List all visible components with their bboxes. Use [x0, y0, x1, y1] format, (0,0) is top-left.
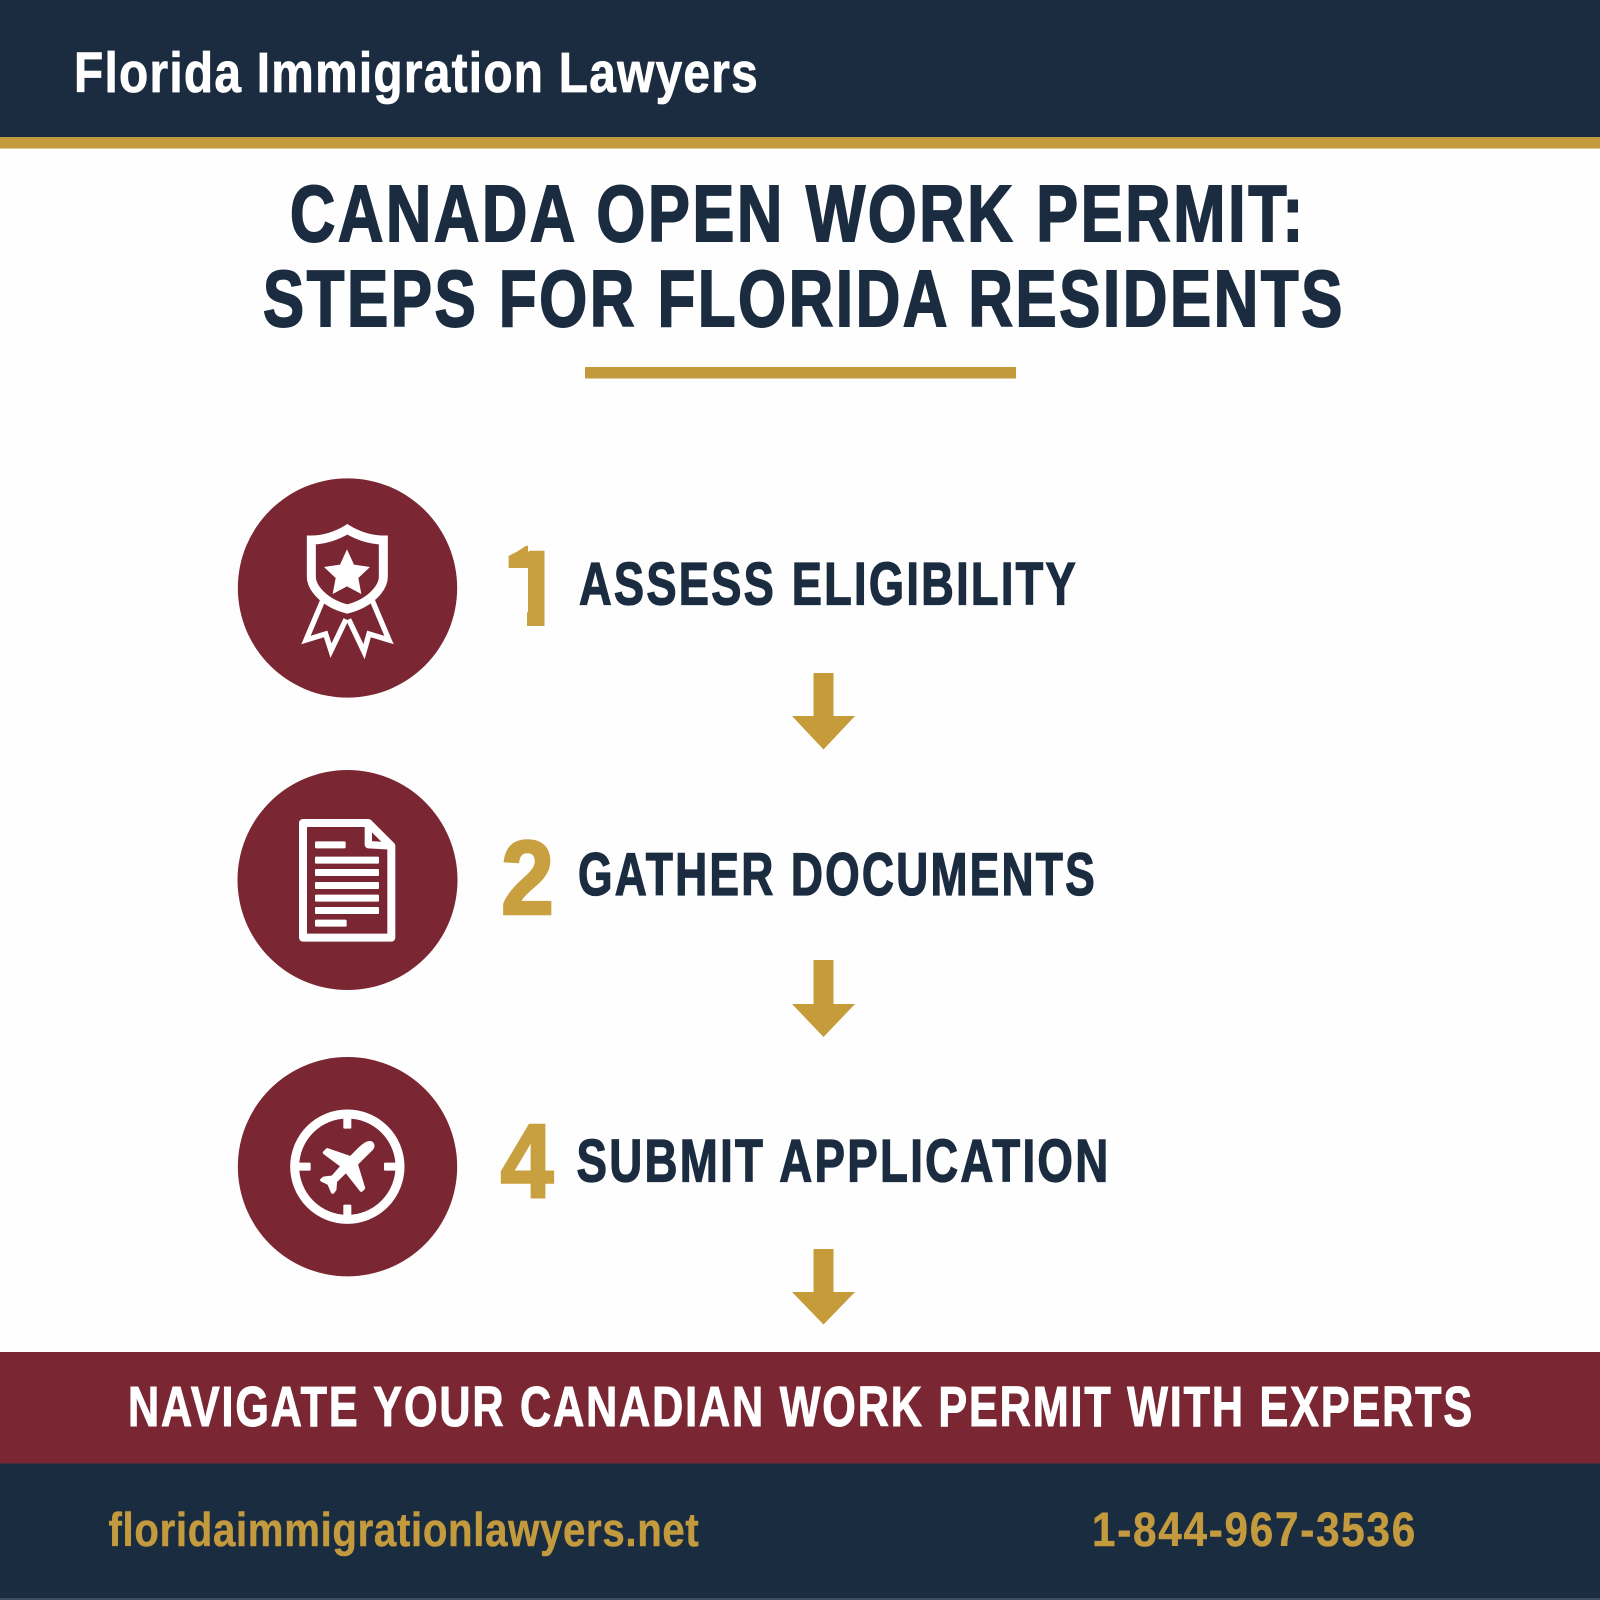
number 4: 4	[500, 1103, 554, 1220]
number 1: 1	[505, 530, 563, 648]
step 2: gather documents	[237, 770, 1097, 990]
icon: document	[237, 770, 457, 990]
step label: ASSESS ELIGIBILITY	[579, 550, 1078, 618]
phone number: 1-844-967-3536	[1092, 1504, 1417, 1557]
arrow 3	[792, 1249, 855, 1324]
step label: SUBMIT APPLICATION	[576, 1128, 1110, 1194]
icon: plane in compass	[238, 1057, 457, 1276]
title underline	[585, 367, 1016, 378]
step 3: submit application	[238, 1057, 1111, 1276]
step 1: assess eligibility	[238, 478, 1078, 698]
title	[263, 169, 1345, 343]
number 2: 2	[501, 820, 554, 937]
call to action banner	[0, 1352, 1600, 1464]
footer band	[0, 1464, 1600, 1600]
number 1	[508, 546, 544, 626]
arrow 2	[792, 960, 855, 1037]
brand name: Florida Immigration Lawyers	[74, 41, 759, 105]
icon: shield with star and ribbons	[238, 478, 457, 698]
step label: GATHER DOCUMENTS	[578, 841, 1097, 908]
website: floridaimmigrationlawyers.net	[108, 1503, 700, 1556]
arrow 1	[792, 673, 855, 750]
title: CANADA OPEN WORK PERMIT:	[290, 169, 1306, 258]
header band	[0, 0, 1600, 148]
